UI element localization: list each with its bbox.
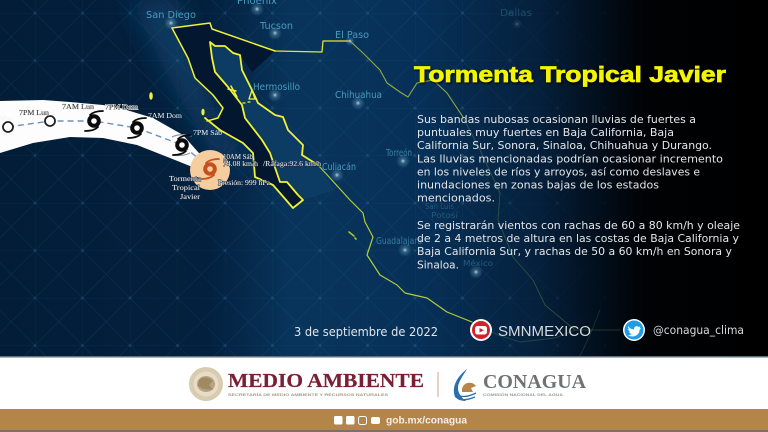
track labels: /Ráfaga:92.6 km/h (263, 159, 321, 168)
logo text: Conagua: COMISIÓN NACIONAL DEL AGUA (483, 392, 563, 397)
city labels: Torreón (385, 147, 412, 159)
water: Gulf of California (210, 42, 335, 200)
icon: twitter (623, 319, 645, 341)
date: 3 de septiembre de 2022 (294, 325, 438, 339)
land: Baja California peninsula (172, 23, 303, 208)
track labels: 10AM Sáb (223, 152, 253, 161)
city labels (146, 0, 532, 279)
forecast track dashed line (8, 121, 210, 168)
track labels: 7PM Sáb (193, 128, 222, 137)
track labels: Javier (180, 192, 201, 201)
city labels: México (463, 258, 493, 268)
track labels: Tropical (172, 183, 200, 192)
body text: de 2 a 4 metros de altura en las costas de Baja California y (417, 232, 739, 245)
icon: youtube (470, 319, 492, 341)
track labels: 7PM Dom (105, 102, 138, 112)
body text: Las lluvias mencionadas podrían ocasionar incremento (417, 152, 723, 166)
body text: Sinaloa. (417, 258, 459, 272)
city labels: Tucson (259, 21, 293, 32)
city labels: Hermosillo (253, 82, 300, 93)
footer panel (0, 358, 768, 409)
map background (0, 0, 639, 356)
track labels (0, 102, 321, 201)
body text: California Sur, Sonora, Sinaloa, Chihuahua y Durango. (417, 139, 712, 152)
city labels: Potosí (431, 211, 459, 220)
icon: Conagua logo (454, 369, 476, 401)
map: coastlines and borders (150, 23, 620, 356)
body text: Baja California Sur, y rachas de 50 a 60 km/h en Sonora y (417, 245, 732, 258)
city labels: Culiacán (322, 161, 356, 173)
logo text: Medio Ambiente: SECRETARÍA DE MEDIO AMBIENTE Y RECURSOS NATURALES (228, 392, 388, 397)
logo text: Medio Ambiente: MEDIO AMBIENTE (228, 370, 424, 392)
city labels: El Paso (335, 30, 369, 41)
forecast points (3, 111, 192, 156)
body text: mencionados. (417, 192, 495, 204)
storm track band (0, 100, 210, 170)
track labels: Mar (0, 114, 12, 123)
title: Tormenta Tropical Javier (414, 62, 727, 87)
body text: en los niveles de ríos y arroyos, así como deslaves e (417, 166, 700, 178)
body text: inundaciones en zonas bajas de los estados (417, 178, 659, 192)
track labels: Tormenta (169, 174, 202, 183)
track labels: 7AM Lun (62, 102, 94, 111)
social icons (334, 416, 380, 424)
city labels: San Diego (146, 10, 196, 21)
footer band (0, 409, 768, 432)
website: gob.mx/conagua (386, 414, 467, 426)
city labels: Guadalajara (376, 236, 422, 247)
icon: national seal (189, 367, 223, 401)
city labels: San Luis (425, 202, 454, 211)
twitter handle: @conagua_clima (653, 323, 744, 337)
track labels: 7AM Dom (148, 111, 182, 120)
city labels: Dallas (500, 8, 532, 19)
track labels: Presión: 999 hPa (218, 178, 271, 187)
body text: Sus bandas nubosas ocasionan lluvias de fuertes a (417, 113, 696, 126)
body text: puntuales muy fuertes en Baja California, Baja (417, 126, 674, 139)
current position marker (190, 150, 230, 190)
body text: Se registrarán vientos con rachas de 60 a 80 km/h y oleaje (417, 219, 740, 232)
city labels: Chihuahua (335, 90, 382, 101)
track labels: 74.08 km/h (223, 159, 258, 168)
track labels: 7PM Lun (19, 108, 49, 117)
youtube handle: SMNMEXICO (498, 323, 591, 340)
logo text: Conagua: CONAGUA (483, 371, 587, 393)
body text (417, 113, 740, 272)
